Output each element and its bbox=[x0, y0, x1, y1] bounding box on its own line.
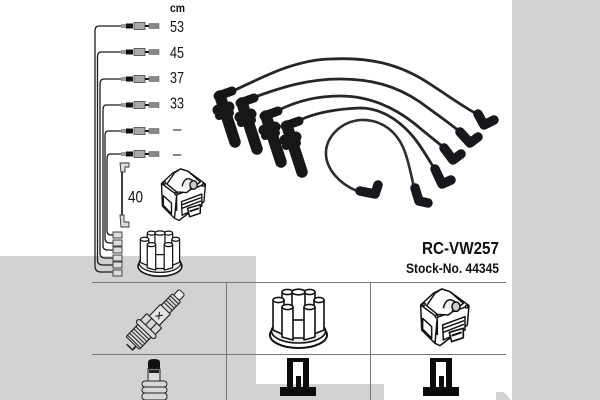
wire length labels bbox=[170, 1, 185, 163]
icon: distributor cap bbox=[270, 289, 327, 348]
stock number: Stock-No. 44345 bbox=[406, 261, 499, 276]
cable 5 bbox=[326, 120, 414, 191]
short coil lead with length: 40 bbox=[128, 188, 143, 206]
background gray panel: lower left bbox=[0, 256, 256, 400]
cable 4 bbox=[300, 108, 434, 168]
ignition cable set photo bbox=[233, 59, 494, 203]
cable 1 bbox=[233, 59, 477, 114]
icon: terminal A bbox=[280, 358, 316, 396]
background gray panel: right bbox=[512, 0, 600, 400]
parts table grid bbox=[92, 282, 506, 400]
wire length labels: cm bbox=[170, 1, 185, 15]
wire length labels: 37 bbox=[170, 70, 184, 87]
wire length labels: – bbox=[173, 146, 182, 163]
background gray patch: bottom right bbox=[496, 392, 511, 400]
wire length labels: – bbox=[173, 121, 182, 138]
icon: spark plug bbox=[120, 283, 191, 355]
icon: rubber boot seal bbox=[142, 359, 167, 400]
wire length labels: 45 bbox=[170, 45, 184, 62]
background gray panel: bottom centre bbox=[256, 384, 384, 400]
icon: small ignition coil bbox=[161, 169, 205, 220]
part number: RC-VW257 bbox=[422, 238, 499, 258]
spark plug boots bbox=[218, 91, 302, 172]
cable 2 bbox=[255, 79, 459, 131]
icon: ignition coil bbox=[421, 289, 469, 346]
wiring diagram bbox=[95, 22, 159, 276]
wire length labels: 33 bbox=[170, 96, 184, 112]
icon: small distributor cap bbox=[138, 231, 182, 276]
wire length labels: 53 bbox=[170, 19, 184, 36]
short coil lead with length bbox=[120, 163, 143, 227]
icon: terminal B bbox=[423, 358, 459, 396]
boots near end bbox=[360, 114, 494, 203]
cable 3 bbox=[279, 96, 443, 147]
